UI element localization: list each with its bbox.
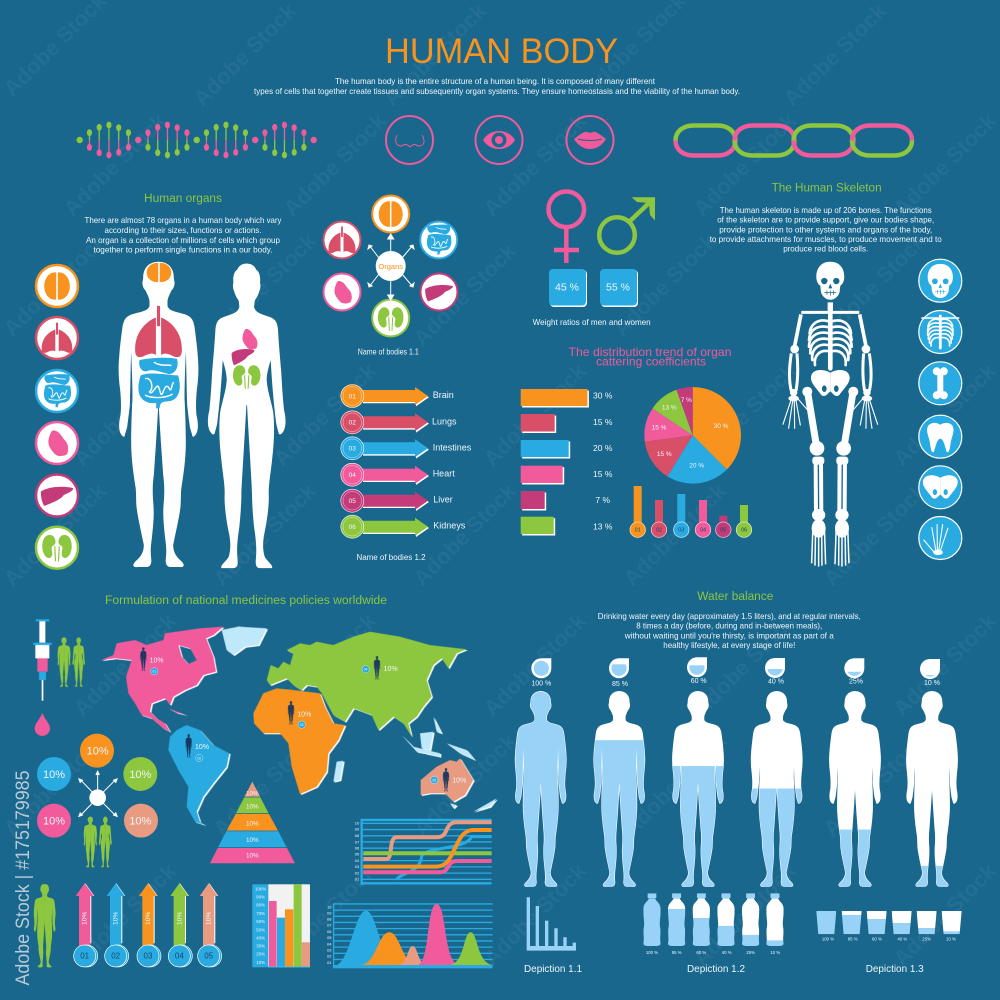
pie chart: 13 % [662,404,677,411]
chart: pyramid: 10% [246,821,259,828]
figure: water 40 percent [749,692,804,887]
diagram: percent circles: 10% [129,816,152,828]
stock watermark pattern: Adobe Stock [478,858,592,971]
arrow: 05: 05 [204,952,214,961]
heading: human organs: Human organs [144,193,222,205]
stat box: 55 percent [600,269,638,307]
icon: green couple [58,637,85,687]
heading: distribution: cattering coefficients [596,355,706,369]
arrow: 04 [168,883,192,967]
panel: bone icons [919,259,962,560]
chart: pyramid: 10% [246,853,259,860]
chart axis labels: line tracks: 03 [355,864,360,869]
stock watermark pattern: Adobe Stock [688,608,802,721]
stock watermark pattern: Adobe Stock [818,478,932,591]
icon: eye [476,116,522,164]
stat box: 45 percent: 45 % [555,282,579,294]
stock watermark pattern: Adobe Stock [268,858,382,971]
text: skeleton description: produce red blood cells. [783,244,868,254]
stock watermark pattern: Adobe Stock [208,228,322,341]
chart axis labels: bell curves: 04 [327,941,332,946]
chart axis labels: line tracks: 02 [355,870,360,875]
world map and lower-left graphics [33,619,497,968]
chart: depiction 1.3 cups: 25% [922,937,931,942]
row: brain [341,384,454,408]
chart: depiction 1.3 cups: 60 % [872,937,882,942]
caption: Name of bodies 1.2 [356,553,426,562]
heading: medicines: Formulation of national medicines policies worldwide [105,595,387,607]
chart: stacked percent bars: 70% [256,911,265,916]
bar chart: 13 % [593,522,613,532]
chart: stacked percent bars [252,884,310,968]
chart: depiction 1.3 cups: 40 % [897,937,907,942]
row: liver: Liver [433,495,453,505]
chart axis labels: line tracks: 09 [355,827,360,832]
row: liver [341,489,453,512]
chart axis labels: bell curves: 02 [327,954,332,959]
heading: distribution: The distribution trend of organ [568,345,732,359]
bar chart [521,389,613,536]
row: brain: Brain [433,390,454,400]
lollipop chart: 06 [741,528,747,534]
stock watermark pattern: Adobe Stock [278,108,392,221]
bar chart: 7 % [595,495,610,505]
chart: depiction 1.2 bottles: 60 % [696,950,706,955]
chart: stacked percent bars: 50% [256,927,265,932]
map markers: 10% [195,744,209,751]
arrow: 05: 10% [206,912,213,925]
chart axis labels: bell curves: 09 [327,910,332,915]
heading: skeleton: The Human Skeleton [772,183,882,195]
chart: depiction 1.1 [527,897,576,951]
figure: water 100 percent [513,692,568,887]
chart: stacked percent bars: 100% [255,887,266,892]
stock watermark pattern: Adobe Stock [618,728,732,841]
chart: depiction 1.2 bottles: 85 % [672,950,682,955]
stock watermark pattern: Adobe Stock [58,108,172,221]
arrow: 04: 10% [176,912,183,925]
chart axis labels: line tracks: 08 [355,833,360,838]
figure: water 85 percent [592,692,647,887]
icon: male symbol [599,197,655,253]
row: intestines: 03 [349,446,356,453]
chart: depiction 1.2 bottles: 40 % [722,950,732,955]
chart axis labels: bell curves: 06 [327,929,332,934]
row: liver: 05 [349,498,356,505]
lollipop chart: 02 [656,528,662,534]
water drops row: 25% [849,679,863,686]
chart: pyramid: 10% [246,804,259,811]
stock watermark pattern: Adobe Stock [268,358,382,471]
arrow: 03: 10% [145,912,152,925]
water drops row: 85 % [612,681,628,688]
chart axis labels: line tracks: 04 [355,858,360,863]
chart axis labels: bell curves: 01 [327,960,332,965]
chart: depiction 1.2 bottles: 100 % [646,950,658,955]
bar chart: 30 % [593,391,613,401]
figure: water 60 percent [670,692,726,887]
row: lungs: 02 [349,420,356,427]
stat box: 55 percent: 55 % [606,282,630,294]
chart: stacked percent bars: 30% [256,944,265,949]
row: lungs: Lungs [432,416,457,426]
chart: depiction 1.3 cups [816,911,962,942]
row: brain: 01 [349,393,356,400]
arrow: 02: 02 [111,952,121,961]
row: heart [341,463,455,486]
row: intestines: Intestines [433,442,472,452]
stat box: 45 percent [549,269,587,307]
map markers: 05 [432,778,436,782]
heading: water balance: Water balance [697,591,773,603]
caption: Name of bodies 1.1 [358,348,419,357]
chart axis labels: line tracks [355,821,360,882]
stock watermark pattern: Adobe Stock [888,858,1000,971]
chart: stacked percent bars: 10% [256,960,265,965]
pie chart [644,387,741,484]
text: skeleton description: to provide attachments for muscles, to produce movement and to [710,234,942,244]
chart: pyramid: 10% [246,791,259,798]
text: organs description: according to their sizes, functions or actions. [104,225,262,235]
text: water description: without waiting until you're thirsty, is important as part of a [624,630,834,640]
water drops row: 40 % [768,679,784,686]
row: kidneys: 06 [349,524,356,531]
text: organs description: An organ is a collection of millions of cells which group [86,235,280,245]
stock watermark pattern: Adobe Stock [208,478,322,591]
map: continents [101,627,497,825]
stock watermark pattern: Adobe Stock [478,108,592,221]
figure: female body with organs [208,264,286,568]
arrow: 01: 01 [80,952,90,961]
row: heart: 04 [349,472,356,479]
stock watermark pattern: Adobe Stock [0,228,112,341]
pie chart: 7 % [681,397,692,404]
intro text: The human body is the entire structure of a human being. It is composed of many different [335,76,656,86]
chart axis labels: bell curves [327,904,332,965]
water charts [527,893,962,955]
chart: bell curves [333,903,493,968]
stock watermark pattern: Adobe Stock [608,228,722,341]
stock watermark pattern: Adobe Stock [408,238,522,351]
caption: Weight ratios of men and women [533,318,651,327]
stock watermark pattern: Adobe Stock [268,608,382,721]
stock watermark pattern: Adobe Stock [688,108,802,221]
lollipop chart [630,486,752,537]
chart: depiction 1.2 bottles: 10 % [770,950,780,955]
chart axis labels: bell curves: 10 [327,904,332,909]
chart: depiction 1.3 cups: 100 % [822,937,834,942]
arrow: 05 [198,883,222,967]
panel: organ icon column [36,265,78,569]
stock watermark pattern: Adobe Stock [888,608,1000,721]
diagram: percent circles [37,734,158,838]
stock watermark pattern: Adobe Stock [688,358,802,471]
map markers: 10% [452,778,466,785]
lollipop chart: 05 [720,528,726,534]
lollipop chart: 01 [635,528,641,534]
row: kidneys: Kidneys [433,521,466,531]
water drops row: 60 % [691,678,707,685]
chain links [676,126,912,156]
text: skeleton description: of the skeleton are to provide support, give our bodies shape, [717,215,934,225]
lollipop chart: 03 [678,528,684,534]
text: water description: 8 times a day (before, during and in-between meals), [636,621,822,631]
chart: pyramid: 10% [246,837,259,844]
list: organ arrows [341,384,472,538]
chart axis labels: bell curves: 05 [327,935,332,940]
chart axis labels: bell curves: 03 [327,947,332,952]
chart: line tracks [361,820,492,885]
stock watermark pattern: Adobe Stock [68,608,182,721]
diagram: percent circles: 10% [43,769,65,781]
chart axis labels: line tracks: 05 [355,852,360,857]
stock watermark pattern: Adobe Stock [888,108,1000,221]
row: heart: Heart [433,469,455,479]
pie chart: 15 % [657,451,672,458]
stock watermark pattern: Adobe Stock [188,0,302,111]
icon: nose [386,116,433,164]
captions: depictions: Depiction 1.2 [687,963,745,975]
text: organs description: There are almost 78 organs in a human body which vary [84,215,282,225]
stock watermark pattern: Adobe Stock [478,608,592,721]
text: skeleton description: The human skeleton is made up of 206 bones. The functions [720,205,932,215]
text: water description: Drinking water every day (approximately 1.5 liters), and at regular intervals, [598,611,861,621]
stock watermark pattern: Adobe Stock [778,0,892,111]
diagram: organs hub: Organs [378,262,403,271]
captions: depictions [524,963,924,975]
title: HUMAN BODY [385,32,618,71]
stock watermark pattern: Adobe Stock [888,358,1000,471]
stock watermark pattern: Adobe Stock [818,728,932,841]
diagram: percent circles: 10% [43,816,65,828]
intro text: types of cells that together create tissues and subsequently organ systems. They ensure homeostasis and the viability of the human body. [254,86,740,96]
stock watermark pattern: Adobe Stock [408,728,522,841]
chart: depiction 1.3 cups: 85 % [848,937,858,942]
map markers: 03 [300,723,304,727]
row: intestines [341,437,472,460]
water drops row: 10 % [924,680,940,687]
figure: male body with organs [119,262,198,567]
stock watermark pattern: Adobe Stock [478,358,592,471]
water drops row [531,657,940,688]
stock watermark pattern: Adobe Stock [0,478,112,591]
bar chart: 20 % [593,443,613,453]
text: organs description: together to perform single functions in a our body. [94,244,272,254]
map markers: 04 [364,668,368,672]
stock watermark pattern: Adobe Stock [0,728,112,841]
chart: pyramid [210,782,295,863]
arrow: 03 [137,883,161,967]
chart axis labels: line tracks: 01 [355,877,360,882]
chart: stacked percent bars: 20% [256,952,265,957]
stock watermark pattern: Adobe Stock [408,478,522,591]
arrow: 03: 03 [144,952,153,961]
stock id label: Adobe Stock | #175179985 [13,770,34,986]
figure: water 25 percent [827,692,883,887]
icon: syringe [33,619,52,736]
chart: stacked percent bars: 40% [256,935,265,940]
arrow: 02: 10% [113,912,120,925]
figure: water 10 percent [904,692,960,887]
pie chart: 30 % [714,423,729,430]
stock watermark pattern: Adobe Stock [688,858,802,971]
text: organs description [84,215,282,254]
figure: large green body [34,884,56,967]
chart axis labels: bell curves: 08 [327,917,332,922]
chart axis labels: bell curves: 07 [327,923,332,928]
map markers [140,647,466,791]
stock watermark pattern: Adobe Stock [618,478,732,591]
arrow: 04: 04 [175,952,184,961]
stock watermark pattern: Adobe Stock [378,0,492,111]
diagram: percent circles: 10% [129,769,152,781]
intro text [254,76,740,96]
bar chart: 15 % [593,469,613,479]
map markers: 01 [152,670,156,674]
chart: depiction 1.2 bottles: 25% [746,950,755,955]
map markers: 02 [197,756,201,760]
text: skeleton description: provide protection to other systems and organs of the body, [719,224,932,234]
icon: dna strand [76,122,317,158]
diagram: percent circles: 10% [87,746,109,758]
water drops row: 100 % [531,681,551,688]
icon: lips [566,116,614,164]
row: kidneys [341,515,466,538]
chart: stacked percent bars: 80% [256,903,265,908]
chart axis labels: line tracks: 07 [355,839,360,844]
map markers: 10% [150,658,164,665]
chart: depiction 1.2 bottles [642,893,785,955]
icon: green couple centre [84,817,112,867]
chart axis labels: line tracks: 06 [355,845,360,850]
map markers: 10% [384,666,398,673]
row: lungs [341,411,457,434]
map markers: 10% [297,711,311,718]
chart axis labels: line tracks: 10 [355,821,360,826]
pie chart: 20 % [689,463,704,470]
bar chart: 15 % [593,417,613,427]
chart: depiction 1.3 cups: 10 % [946,937,956,942]
chart: stacked percent bars: 60% [256,919,265,924]
arrow: 01: 10% [82,912,89,925]
captions: depictions: Depiction 1.3 [866,963,924,975]
heading: distribution [568,345,732,369]
figure: skeleton [783,262,878,567]
lollipop chart: 04 [700,528,706,534]
pie chart: 15 % [652,424,667,431]
text: water description: healthy lifestyle, at every stage of life! [663,640,795,650]
stock watermark pattern: Adobe Stock [818,228,932,341]
icon: female symbol [548,192,584,263]
arrow: 01 [74,883,98,967]
chart: stacked percent bars: 90% [256,895,265,900]
captions: depictions: Depiction 1.1 [524,963,582,975]
text: skeleton description [710,205,942,254]
arrow: 02 [105,883,129,967]
stock watermark pattern: Adobe Stock [68,358,182,471]
stock watermark pattern: Adobe Stock [208,728,322,841]
text: water description [598,611,861,650]
diagram: organs hub [324,196,458,336]
stock watermark pattern: Adobe Stock [68,858,182,971]
